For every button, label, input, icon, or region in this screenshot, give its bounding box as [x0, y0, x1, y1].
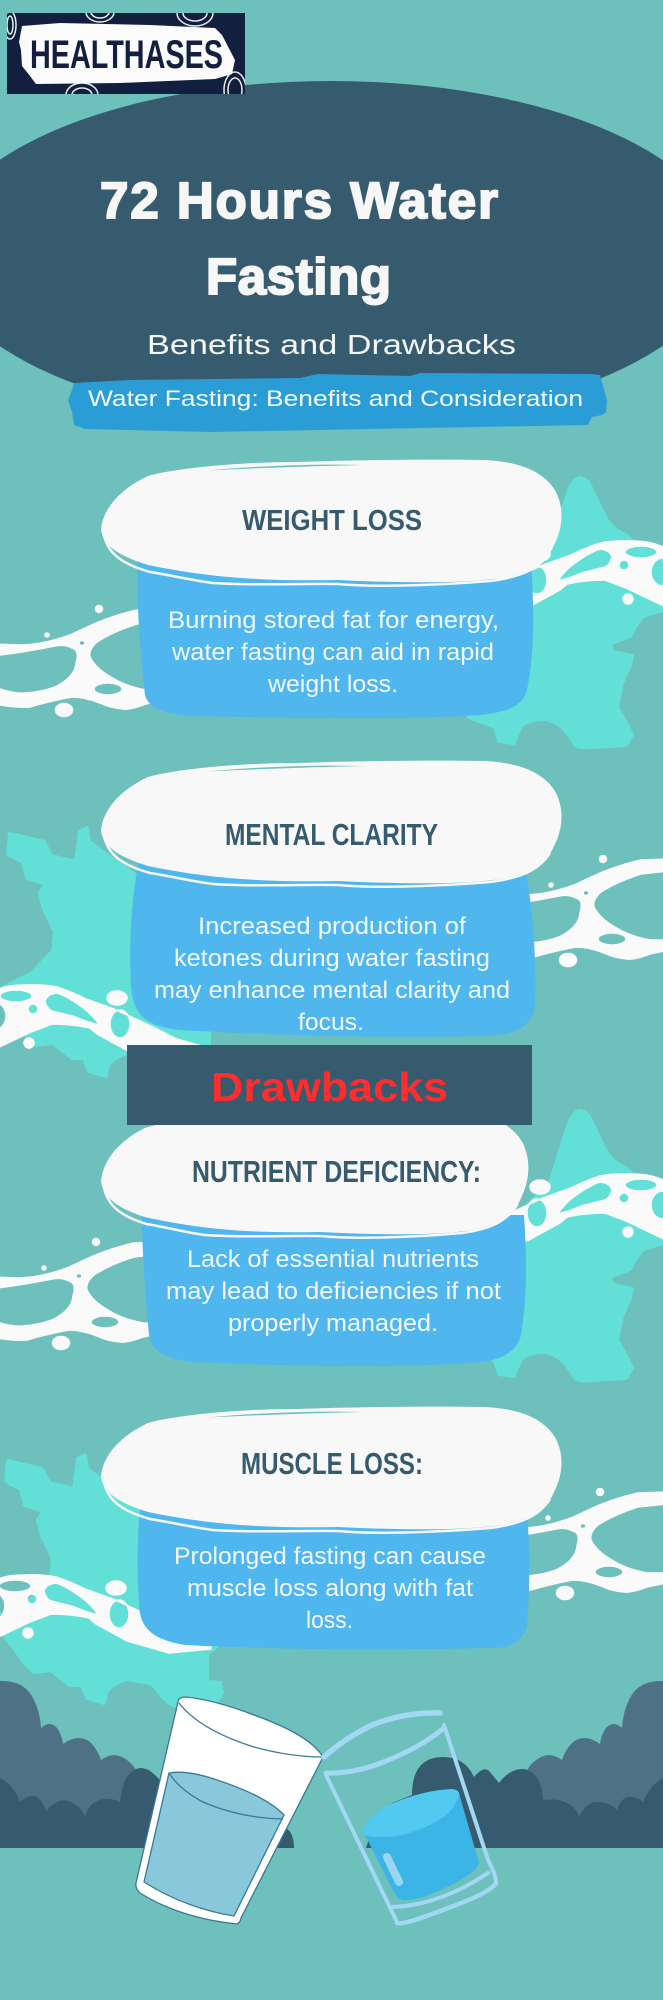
card: mental clarity: focus.	[298, 1009, 364, 1036]
logo: Healthases: HEALTHASES	[30, 33, 223, 77]
card: weight loss: WEIGHT LOSS	[242, 505, 422, 537]
card: mental clarity: Increased production of	[198, 913, 466, 940]
card: nutrient deficiency: may lead to deficiencies if not	[166, 1278, 501, 1305]
card: weight loss	[101, 460, 562, 718]
header ellipse	[0, 81, 663, 425]
title: 72 Hours Water	[100, 172, 498, 229]
card: muscle loss: muscle loss along with fat	[187, 1575, 473, 1602]
bushes	[0, 1681, 663, 1848]
card: nutrient deficiency: properly managed.	[228, 1310, 438, 1337]
card: nutrient deficiency: Lack of essential nutrients	[187, 1246, 479, 1273]
card: muscle loss: MUSCLE LOSS:	[241, 1446, 423, 1481]
title	[100, 172, 498, 305]
banner: water fasting benefits and consideration: Water Fasting: Benefits and Consideration	[88, 386, 583, 411]
banner: water fasting benefits and consideration	[68, 373, 607, 432]
card: muscle loss: Prolonged fasting can cause	[174, 1543, 486, 1570]
card: mental clarity: may enhance mental clarity and	[154, 977, 510, 1004]
card: nutrient deficiency	[101, 1112, 528, 1366]
card: weight loss: Burning stored fat for energy,	[168, 607, 499, 634]
card: mental clarity	[101, 761, 562, 1037]
white water splashes	[0, 541, 663, 1653]
icon: transparent glass of water	[324, 1713, 496, 1923]
card: muscle loss	[101, 1407, 562, 1649]
card: weight loss: weight loss.	[267, 671, 398, 698]
card: mental clarity: MENTAL CLARITY	[225, 817, 438, 852]
logo: Healthases	[7, 13, 245, 94]
section heading: drawbacks: Drawbacks	[211, 1064, 448, 1110]
icon: white glass of water	[136, 1697, 323, 1924]
subtitle: Benefits and Drawbacks	[147, 329, 516, 360]
mainland splash shapes: card backgrounds	[0, 478, 663, 1705]
card: mental clarity: ketones during water fasting	[174, 945, 490, 972]
card: nutrient deficiency: NUTRIENT DEFICIENCY:	[192, 1154, 481, 1189]
section heading: drawbacks	[127, 1045, 532, 1125]
title: Fasting	[206, 248, 391, 305]
card: muscle loss: loss.	[306, 1607, 353, 1634]
card: weight loss: water fasting can aid in rapid	[171, 639, 494, 666]
